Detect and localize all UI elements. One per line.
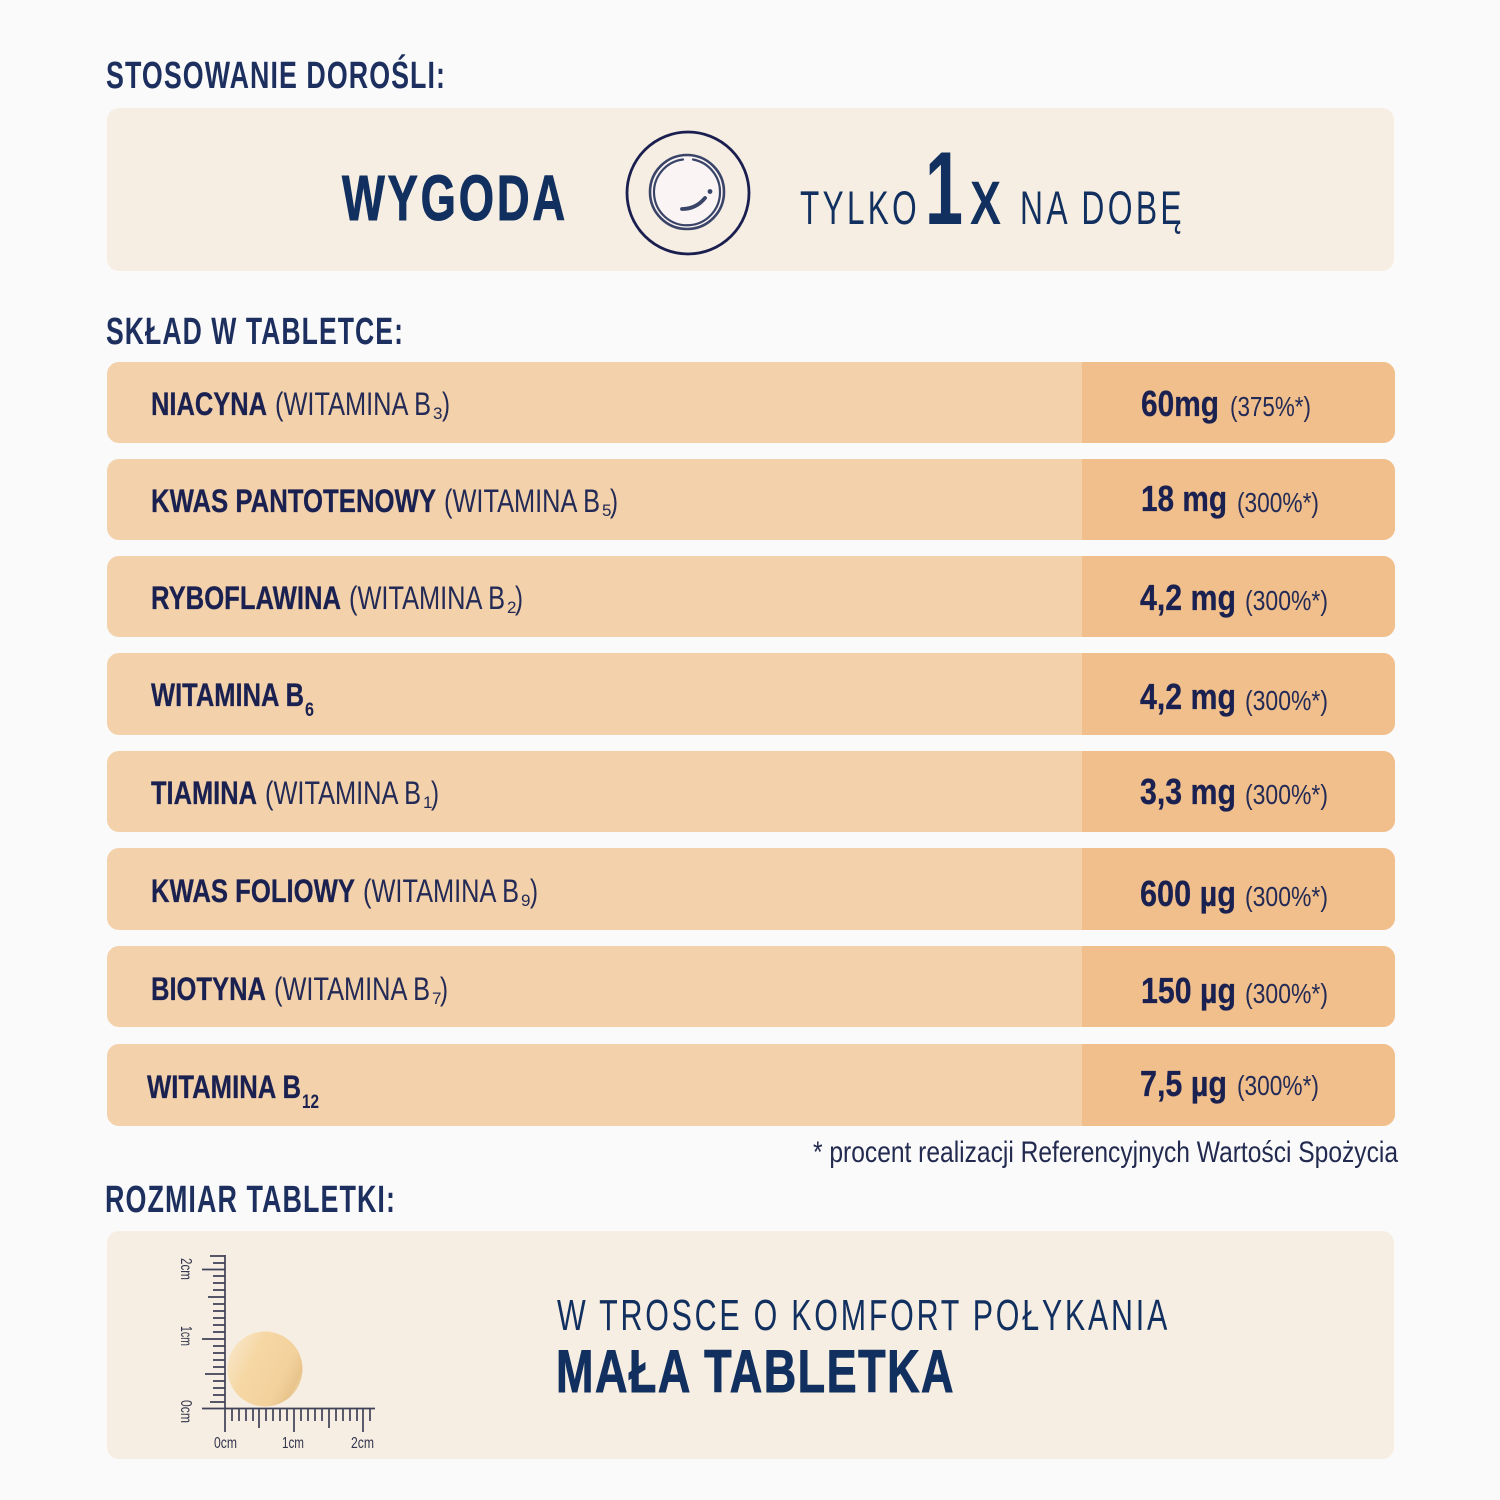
text: small tablet: MAŁA TABLETKA [556, 1338, 955, 1405]
row: niacyna: 60mg [1141, 383, 1219, 424]
x axis labels: 0cm [214, 1435, 237, 1452]
row: witamina b12: (300%*) [1237, 1070, 1319, 1101]
row: kwas foliowy [107, 848, 1395, 930]
row: witamina b6 [107, 653, 1395, 735]
ruler chart: 1cm [282, 1435, 304, 1452]
na dobe: NA DOBĘ [1020, 181, 1185, 234]
row: niacyna: 3 [433, 404, 442, 423]
row: ryboflawina: RYBOFLAWINA [151, 580, 341, 616]
row: ryboflawina: ) [515, 580, 523, 616]
row: ryboflawina: (300%*) [1245, 585, 1328, 616]
row: kwas pantotenowy [107, 459, 1395, 540]
row: ryboflawina: (WITAMINA B [349, 580, 505, 616]
icon: tablet in circle [627, 132, 749, 254]
row: tiamina: 1 [423, 793, 432, 812]
row: witamina b12: 7,5 µg [1140, 1063, 1227, 1104]
ruler chart: 1cm [177, 1326, 194, 1346]
tylko: TYLKO [800, 181, 920, 234]
row: witamina b6: 4,2 mg [1140, 676, 1236, 717]
row: kwas pantotenowy: 18 mg [1141, 478, 1227, 519]
ruler chart [177, 1255, 375, 1452]
row: niacyna [107, 362, 1395, 443]
row: tiamina: (WITAMINA B [265, 775, 421, 811]
row: biotyna: (300%*) [1245, 978, 1328, 1009]
text: once a day [800, 131, 1185, 247]
row: witamina b6: WITAMINA B [151, 677, 304, 713]
row: kwas pantotenowy: (WITAMINA B [444, 483, 600, 519]
heading: sklad: SKŁAD W TABLETCE: [106, 311, 404, 353]
row: witamina b6: 6 [305, 700, 314, 721]
row: kwas foliowy: 600 µg [1140, 873, 1236, 914]
axes [202, 1255, 375, 1432]
row: niacyna: NIACYNA [151, 386, 267, 422]
label: wygoda: WYGODA [342, 162, 568, 234]
row: tiamina: TIAMINA [151, 775, 257, 811]
row: kwas foliowy: ) [530, 873, 538, 909]
row: tiamina [107, 751, 1395, 832]
ruler chart: 0cm [177, 1400, 194, 1423]
row: niacyna: (375%*) [1230, 391, 1311, 422]
row: witamina b12: 12 [302, 1092, 319, 1113]
row: biotyna: BIOTYNA [151, 971, 266, 1007]
row: kwas foliowy: (WITAMINA B [363, 873, 519, 909]
tablet image [228, 1332, 302, 1406]
row: ryboflawina: 4,2 mg [1140, 577, 1236, 618]
panel: dosage [107, 108, 1394, 271]
x: X [970, 169, 1001, 237]
row: witamina b12: WITAMINA B [147, 1069, 301, 1105]
panel: tablet size [107, 1231, 1394, 1459]
row: tiamina: (300%*) [1245, 779, 1328, 810]
row: kwas pantotenowy: 5 [602, 501, 611, 520]
row: biotyna: 7 [432, 989, 441, 1008]
row: kwas pantotenowy: KWAS PANTOTENOWY [151, 483, 436, 519]
row: kwas foliowy: KWAS FOLIOWY [151, 873, 355, 909]
panel background [107, 108, 1394, 271]
row: niacyna: ) [442, 386, 450, 422]
heading: stosowanie: STOSOWANIE DOROŚLI: [106, 53, 446, 97]
row: witamina b6: (300%*) [1245, 685, 1328, 716]
row: ryboflawina: 2 [507, 598, 516, 617]
row: biotyna: ) [440, 971, 448, 1007]
panel background [107, 1231, 1394, 1459]
row: witamina b12 [107, 1044, 1395, 1126]
heading: rozmiar: ROZMIAR TABLETKI: [105, 1179, 396, 1221]
row: tiamina: 3,3 mg [1140, 771, 1236, 812]
row: niacyna: (WITAMINA B [275, 386, 431, 422]
row: ryboflawina [107, 556, 1395, 637]
row: biotyna: 150 µg [1141, 970, 1236, 1011]
y axis labels: 2cm [177, 1258, 194, 1280]
ruler chart: 2cm [351, 1435, 374, 1452]
row: biotyna: (WITAMINA B [274, 971, 430, 1007]
row: kwas foliowy: (300%*) [1245, 881, 1328, 912]
text: comfort: W TROSCE O KOMFORT POŁYKANIA [557, 1291, 1170, 1340]
row: kwas foliowy: 9 [521, 891, 530, 910]
row: biotyna [107, 946, 1395, 1027]
row: kwas pantotenowy: ) [610, 483, 618, 519]
numeral one: 1 [925, 131, 963, 247]
row: kwas pantotenowy: (300%*) [1237, 487, 1319, 518]
row: tiamina: ) [431, 775, 439, 811]
